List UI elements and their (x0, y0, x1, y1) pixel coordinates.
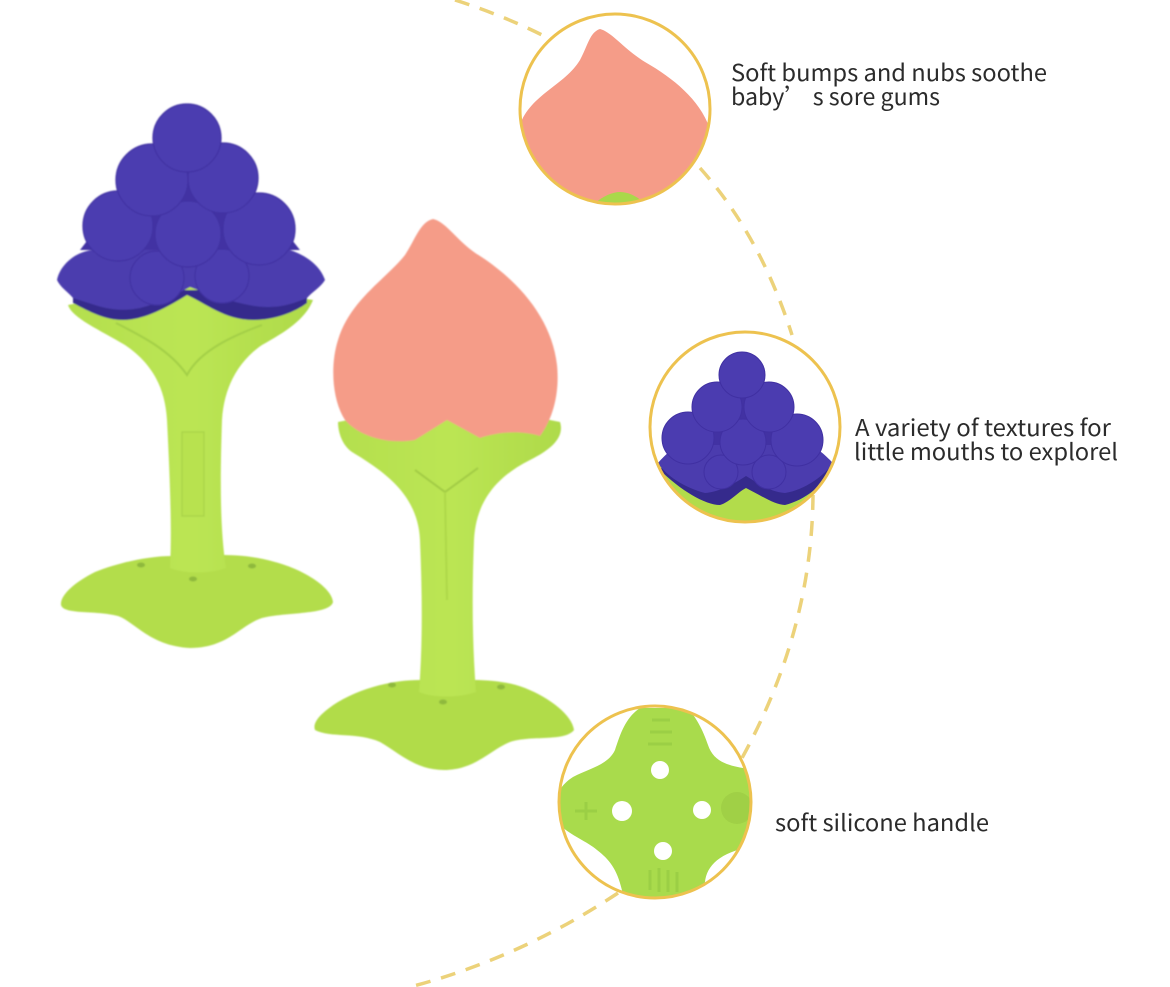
callout text: grape (854, 409, 1118, 467)
teether: peach (314, 219, 574, 770)
grape body (73, 290, 307, 320)
callout circle: peach detail (520, 14, 714, 215)
dashed connector arc (410, 0, 813, 987)
callout text: peach (731, 54, 1047, 112)
peach foot (314, 680, 574, 770)
callout text: peach: baby’ s sore gums (731, 78, 940, 112)
teether: grape (57, 104, 333, 648)
grape stem and leaf (68, 280, 313, 572)
peach fruit (333, 219, 558, 441)
peach stem and leaf (338, 400, 561, 696)
callout text: grape: A variety of textures for (855, 409, 1111, 443)
callout circle: grape detail (650, 332, 840, 530)
callout text: peach: Soft bumps and nubs soothe (731, 54, 1047, 88)
callout text: handle: soft silicone handle (775, 804, 989, 838)
grape foot (61, 555, 333, 648)
callout text: grape: little mouths to explorel (854, 433, 1118, 467)
callout circle: silicone handle detail (555, 706, 755, 905)
